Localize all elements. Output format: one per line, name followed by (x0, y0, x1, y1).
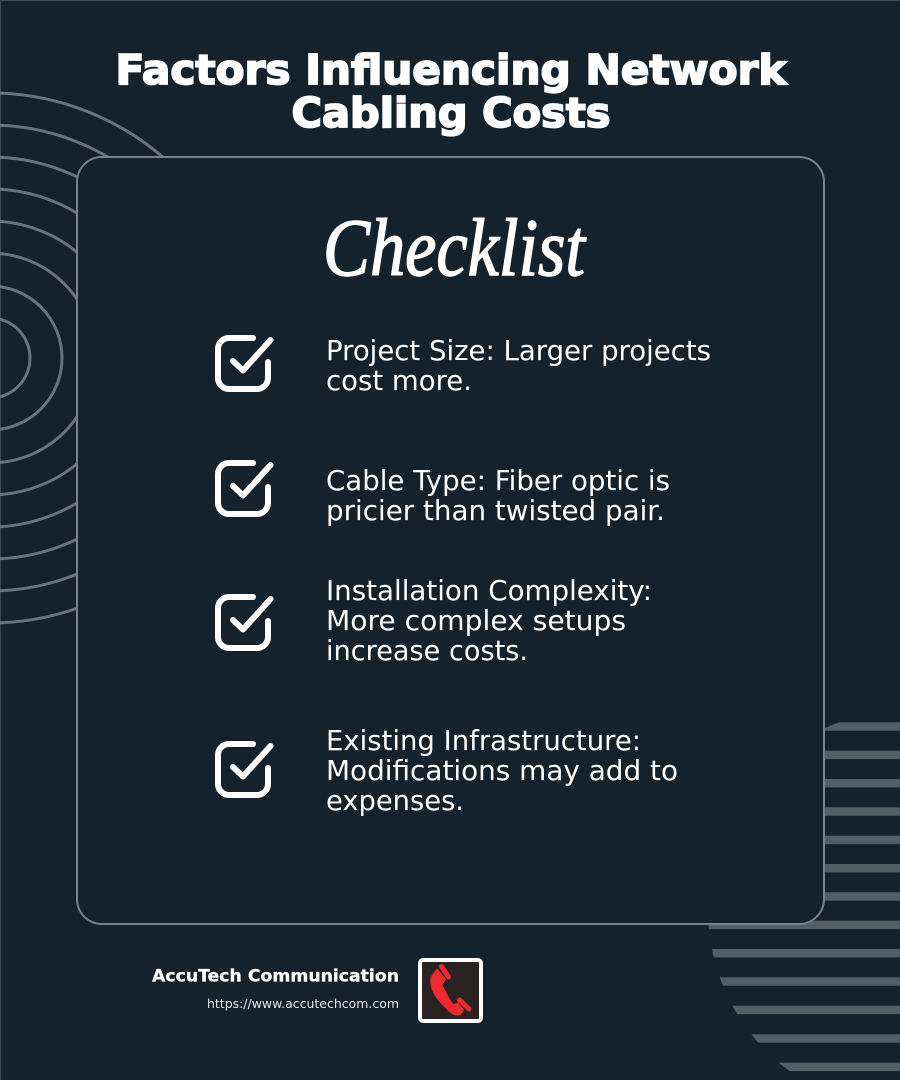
concentric rings decoration (0, 93, 255, 623)
item 1 text: cost more. (326, 364, 472, 397)
item 4 text: expenses. (326, 784, 464, 817)
icon: checkbox 4 (218, 744, 270, 795)
checklist heading: Checklist (323, 202, 587, 293)
item 2 text: pricier than twisted pair. (326, 494, 665, 527)
footer company name and url (152, 966, 399, 1011)
title: Cabling Costs (292, 89, 610, 137)
item 3 text: increase costs. (326, 634, 528, 667)
striped circle decoration (700, 722, 900, 1071)
item 2 text: Cable Type: Fiber optic is (326, 464, 670, 497)
icon: phone logo (420, 960, 481, 1021)
item 3 text (326, 574, 652, 667)
item 2 text (326, 464, 670, 527)
item 1 text: Project Size: Larger projects (326, 334, 711, 367)
item 4 text: Modifications may add to (326, 754, 678, 787)
title (116, 46, 788, 137)
icon: checkbox 1 (218, 338, 270, 389)
item 1 text (326, 334, 711, 397)
title: Factors Influencing Network (116, 46, 788, 94)
footer company name and url: https://www.accutechcom.com (207, 996, 399, 1011)
panel: checklist card (77, 157, 824, 924)
footer company name and url: AccuTech Communication (152, 966, 399, 986)
item 3 text: Installation Complexity: (326, 574, 652, 607)
icon: checkbox 3 (218, 597, 270, 648)
item 3 text: More complex setups (326, 604, 626, 637)
item 4 text (326, 724, 678, 817)
item 4 text: Existing Infrastructure: (326, 724, 641, 757)
icon: checkbox 2 (218, 463, 270, 514)
